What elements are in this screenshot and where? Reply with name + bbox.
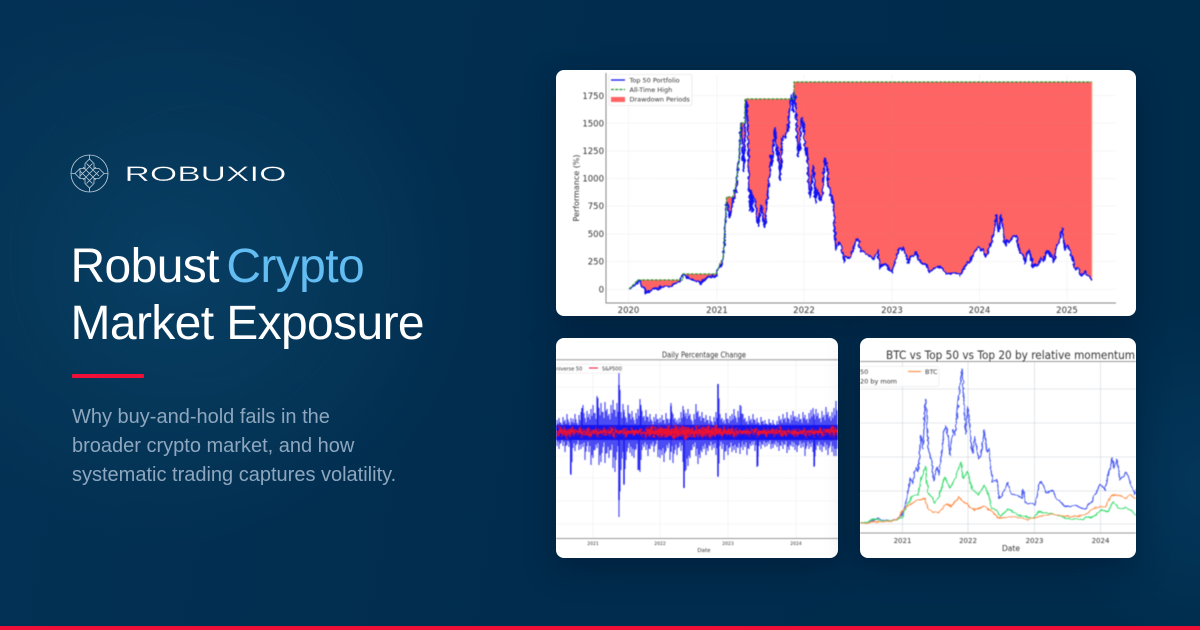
title [70, 240, 424, 350]
logo [70, 154, 286, 192]
y axis title: Performance (%) [572, 154, 581, 222]
legend: All-Time High [630, 86, 672, 94]
legend: S&P500 [602, 366, 622, 372]
x axis title: Date [1002, 544, 1020, 553]
legend: 50 [860, 368, 868, 376]
subtitle: Why buy-and-hold fails in the [72, 406, 330, 428]
x axis labels: 2024 [969, 306, 990, 316]
x axis labels [618, 306, 1078, 316]
legend: Top 50 Portfolio [628, 76, 680, 84]
subtitle: broader crypto market, and how [72, 435, 354, 457]
portfolio line [629, 92, 1092, 293]
x axis labels: 2022 [959, 537, 977, 545]
series lines [860, 369, 1136, 523]
y axis labels: 250 [588, 258, 604, 268]
accent rule [72, 374, 144, 378]
x axis labels: 2023 [1026, 537, 1043, 545]
legend: 20 by mom [860, 378, 897, 386]
subtitle: systematic trading captures volatility. [72, 464, 396, 486]
panel: BTC vs top 50 vs top 20 chart [860, 338, 1136, 558]
x axis labels: 2021 [706, 306, 728, 316]
legend [609, 74, 692, 106]
y axis labels: 1750 [582, 92, 604, 102]
x axis labels: 2024 [1092, 537, 1110, 545]
y axis labels: 1500 [582, 120, 604, 130]
legend: niverse 50 [556, 366, 582, 372]
green: top 20 by momentum [860, 462, 1136, 523]
x axis labels [587, 541, 802, 547]
bottom accent bar [0, 626, 1200, 630]
subtitle [72, 406, 396, 486]
title: Daily Percentage Change [662, 350, 746, 360]
y axis labels: 500 [588, 230, 604, 240]
x axis labels: 2021 [587, 541, 599, 547]
decorative rings [0, 0, 560, 630]
y axis labels [582, 92, 604, 296]
icon: logo mark [70, 154, 108, 192]
x axis labels: 2022 [793, 306, 815, 316]
title: Market Exposure [70, 297, 424, 350]
x axis labels: 2022 [654, 541, 666, 547]
x axis title: Date [697, 548, 711, 554]
y axis labels: 1000 [582, 174, 604, 184]
logo wordmark: ROBUXIO [124, 162, 286, 186]
panel: top 50 portfolio performance chart [556, 70, 1136, 316]
legend: BTC [925, 368, 938, 376]
x axis labels [894, 537, 1110, 545]
panel: daily percentage change chart [556, 338, 838, 558]
y axis labels: 1250 [582, 147, 604, 157]
x axis labels: 2020 [618, 306, 639, 316]
drawdown area [625, 82, 1096, 306]
legend [550, 364, 622, 373]
orange: BTC [860, 495, 1136, 523]
legend [852, 366, 939, 386]
x axis labels: 2023 [881, 306, 903, 316]
all-time high line [629, 82, 1092, 289]
legend: Drawdown Periods [630, 96, 690, 104]
blue: top 50 [860, 369, 1136, 523]
x axis labels: 2023 [722, 541, 734, 547]
y axis labels: 0 [599, 286, 604, 296]
x axis labels: 2024 [790, 541, 802, 547]
x axis labels: 2025 [1056, 306, 1078, 316]
y axis labels: 750 [588, 202, 604, 212]
blue daily change series [556, 372, 838, 517]
red S&P500 series [556, 426, 838, 440]
title: RobustCrypto [70, 240, 364, 293]
x axis labels: 2021 [894, 537, 911, 545]
